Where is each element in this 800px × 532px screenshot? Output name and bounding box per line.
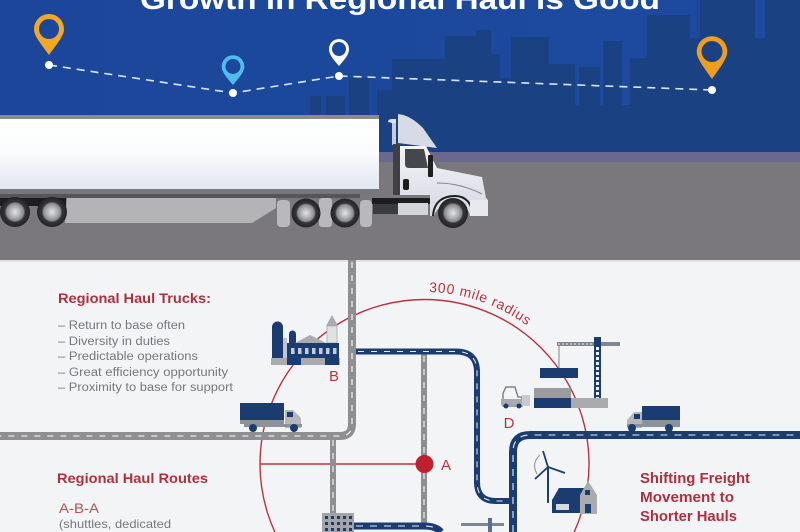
route description: (shuttles, dedicated	[59, 517, 171, 531]
dashed route line	[49, 65, 712, 93]
gray road: center vertical	[421, 354, 427, 523]
label D: D	[504, 415, 515, 432]
list: truck traits: – Return to base often	[58, 320, 185, 332]
exhaust stack	[388, 119, 400, 195]
mud flaps	[277, 198, 372, 227]
wheel arch	[433, 196, 472, 216]
truck	[0, 114, 488, 228]
icon: wind turbine	[535, 451, 565, 503]
chassis	[372, 198, 430, 215]
windshield	[430, 151, 441, 167]
callout: shifting freight: Shifting Freight	[640, 471, 750, 487]
list: truck traits: – Great efficiency opportunity	[58, 367, 228, 379]
icon: factory B	[271, 315, 340, 365]
icon: port crane and containers	[534, 337, 620, 408]
gray road: top and left	[0, 260, 352, 436]
list: truck traits	[58, 320, 234, 394]
drive wheel 2	[330, 198, 360, 228]
marker A	[416, 455, 434, 473]
list: truck traits: – Diversity in duties	[58, 336, 170, 348]
label A: A	[441, 457, 451, 474]
icon: orange pin left	[34, 14, 64, 69]
callout: shifting freight: Movement to	[640, 490, 734, 506]
icon: forklift	[501, 387, 530, 408]
list: truck traits: – Proximity to base for support	[58, 382, 234, 394]
panel: night sky	[0, 0, 800, 152]
icon: orange pin right	[697, 36, 727, 94]
front wheel	[438, 198, 468, 228]
heading: regional haul routes: Regional Haul Routes	[57, 471, 208, 486]
drive wheel 1	[292, 198, 320, 228]
blue road: right route	[513, 435, 800, 532]
icon: delivery truck right	[627, 406, 680, 432]
gray road: lower vertical	[330, 438, 336, 514]
mirror	[428, 155, 433, 177]
cab body	[400, 146, 488, 216]
trailer box	[0, 115, 379, 206]
icon: farmhouse	[552, 481, 597, 514]
icon: city building	[322, 513, 354, 532]
label B: B	[329, 368, 339, 385]
trailer side skirt	[65, 198, 276, 223]
list: truck traits: – Predictable operations	[58, 351, 198, 363]
city skyline	[310, 0, 800, 152]
callout: shifting freight: Shorter Hauls	[640, 509, 737, 525]
300 mile radius circle	[260, 300, 589, 532]
rear wheel 1	[0, 197, 30, 227]
cab window	[405, 149, 428, 168]
hood line	[437, 183, 482, 194]
panel: route map background	[0, 262, 800, 532]
icon: delivery truck left	[240, 403, 302, 432]
icon: cyan pin	[222, 55, 244, 97]
rear wheel 2	[37, 197, 67, 227]
bumper	[470, 200, 488, 216]
callout: shifting freight	[640, 471, 750, 525]
icon: white pin	[329, 39, 349, 80]
blue road: upper route	[356, 352, 513, 501]
blue road: bottom route	[352, 526, 441, 532]
icon: small crane bottom	[461, 518, 504, 532]
radius label: 300 mile radius	[430, 282, 530, 324]
cab fairing	[398, 114, 437, 148]
route label A-B-A: A-B-A	[59, 500, 100, 516]
panel: road ground	[0, 152, 800, 262]
door handle	[403, 179, 409, 190]
heading: regional haul trucks: Regional Haul Trucks:	[58, 291, 211, 306]
